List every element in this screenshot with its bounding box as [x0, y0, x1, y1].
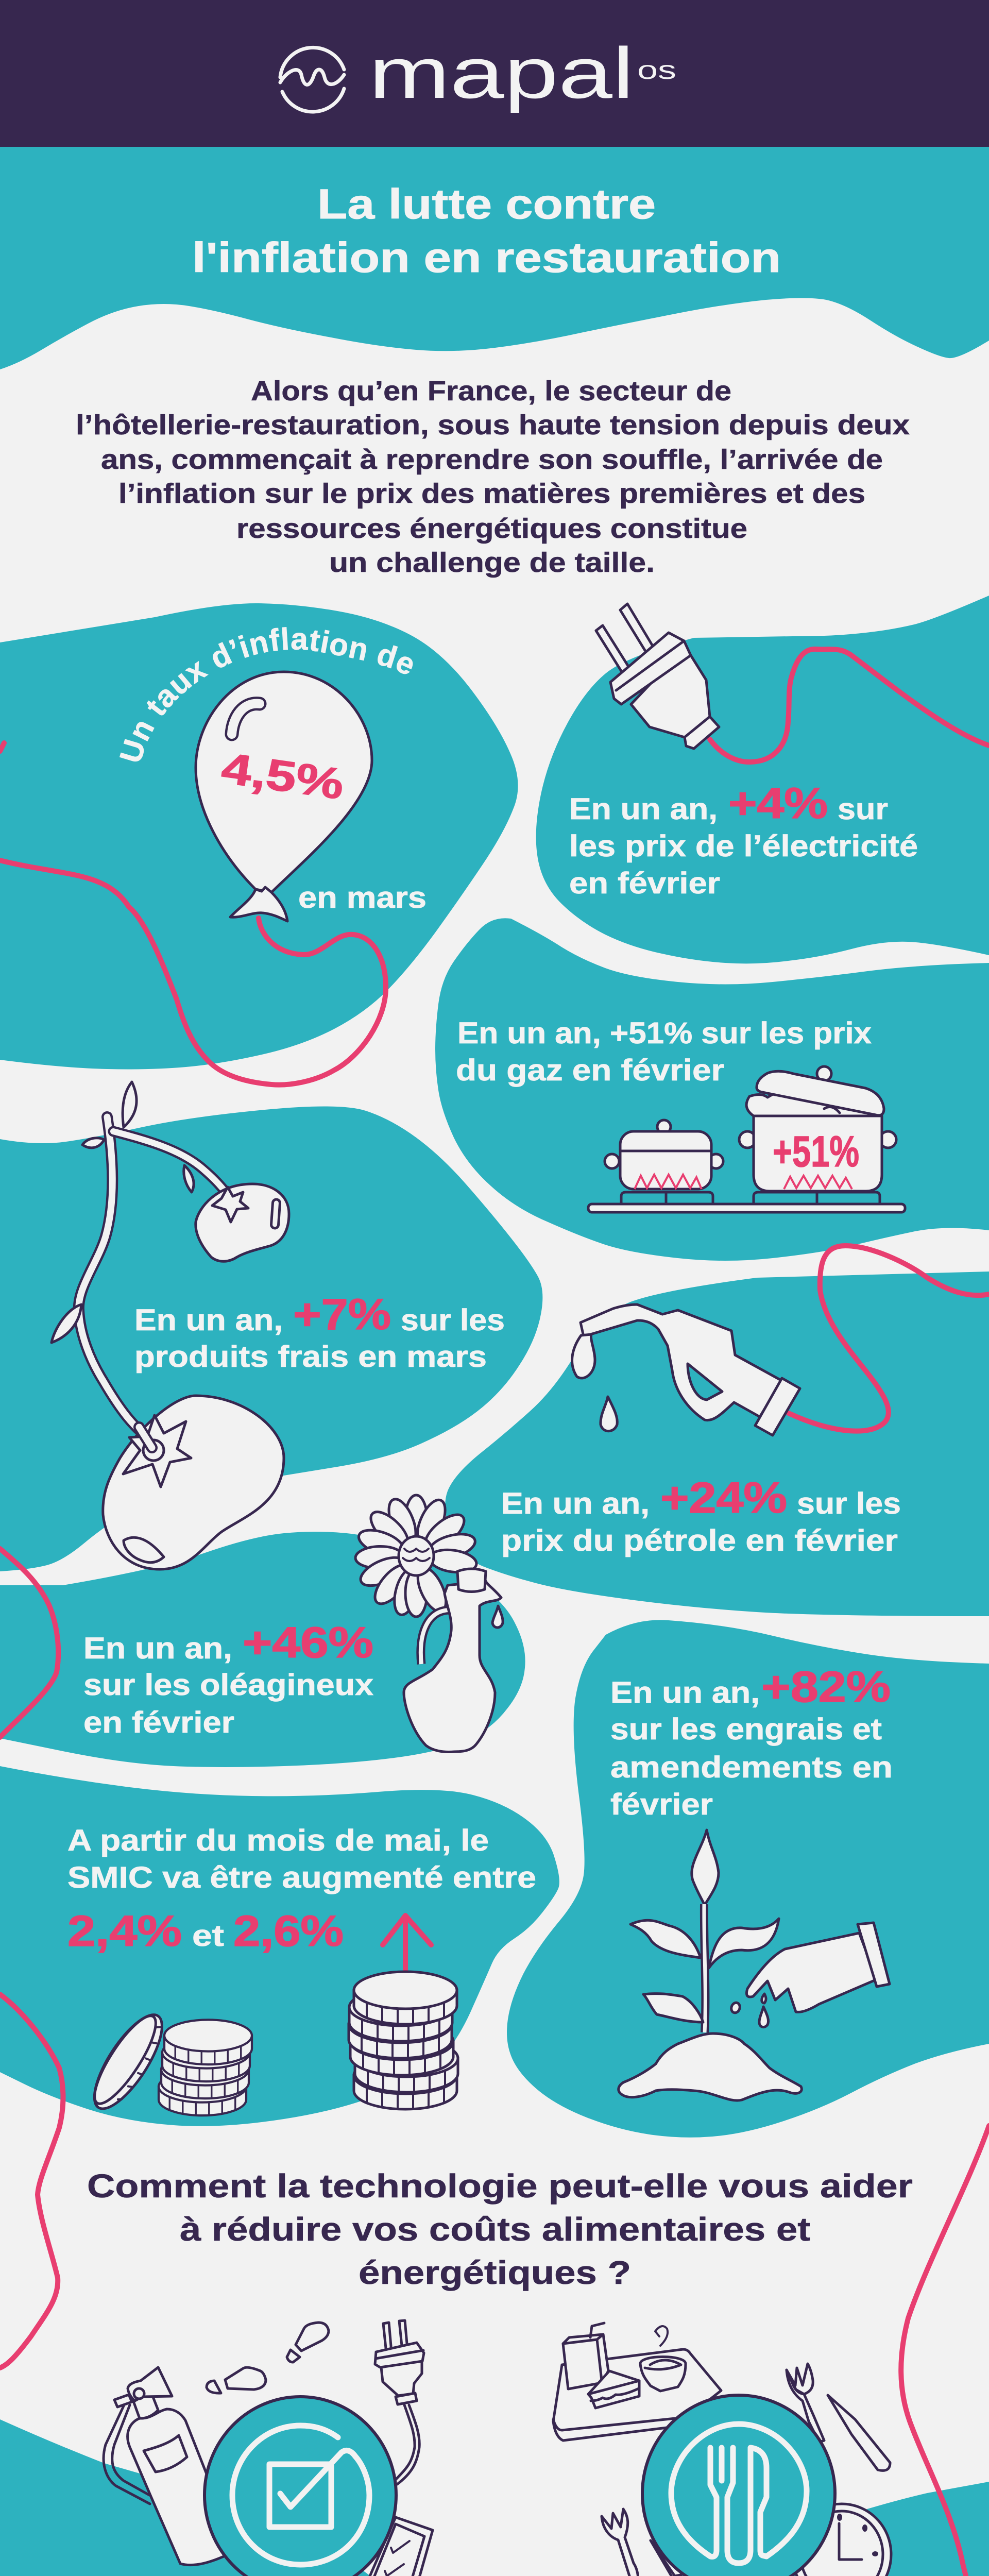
icon: tilted coin [82, 2006, 174, 2118]
panel: fresh products [0, 1082, 542, 1571]
value 4,5%: 4,5% [219, 743, 347, 808]
title: La lutte contre [317, 181, 656, 228]
icon: fork and knife top right [787, 2364, 890, 2470]
icon: extinguisher [104, 2367, 237, 2565]
icon: tray [553, 2349, 721, 2441]
icon: big pot with +51% [739, 1066, 896, 1204]
icon: big tomato [103, 1396, 284, 1569]
title: l'inflation en restauration [192, 234, 781, 281]
text: fertiliser: février [610, 1788, 713, 1821]
header bar with logo [0, 0, 989, 147]
question heading: énergétiques ? [359, 2254, 631, 2291]
text: oleaginous [83, 1618, 373, 1739]
text: fertiliser: En un an, [610, 1676, 760, 1709]
icon: flower and oil bottle [355, 1495, 503, 1752]
flower [355, 1495, 478, 1617]
icon: right coin stack [349, 1972, 458, 2109]
panel: gas [435, 918, 989, 1261]
text: fresh products: En un an, [134, 1303, 283, 1337]
balloon string [0, 860, 386, 1085]
icon: small pot on stove [605, 1120, 723, 1204]
intro text: un challenge de taille. [329, 547, 655, 578]
text: minimum wage: A partir du mois de mai, le [67, 1824, 489, 1857]
icon: big pot with +51%: +51% [773, 1127, 859, 1176]
text: electricity: sur [838, 792, 888, 826]
checkbox [269, 2464, 331, 2527]
curved label: Un taux d’inflation de [120, 627, 413, 761]
intro text: ans, commençait à reprendre son souffle, l’arrivée de [101, 444, 883, 475]
text: petrol: sur les [797, 1487, 901, 1520]
text: oleaginous: en février [83, 1706, 234, 1739]
icon: vine [52, 1082, 235, 1437]
text: gas: du gaz en février [456, 1054, 724, 1087]
text: oleaginous: En un an, [83, 1632, 232, 1665]
panel: electricity [536, 596, 989, 963]
icon: drink carton [563, 2323, 608, 2389]
text: electricity: +4% [728, 779, 828, 827]
intro text: l’inflation sur le prix des matières premières et des [118, 478, 865, 509]
icon: balloon [196, 672, 372, 921]
text: fresh products: produits frais en mars [134, 1340, 487, 1374]
icon: plug [375, 2320, 424, 2484]
plate ring with fork and knife [671, 2424, 807, 2563]
text: minimum wage: SMIC va être augmenté entre [67, 1861, 536, 1894]
text: minimum wage: et [192, 1919, 224, 1953]
pink line: left lower [0, 1994, 63, 2368]
text: fresh products: sur les [401, 1303, 505, 1337]
intro text [76, 376, 910, 578]
illustration: compliance plate [104, 2320, 433, 2576]
text: fresh products [134, 1290, 505, 1374]
text: petrol: En un an, [501, 1487, 650, 1520]
text: oleaginous: +46% [243, 1618, 373, 1667]
panel: petrol [445, 1246, 989, 1616]
oil bottle [404, 1569, 503, 1752]
pink line: left upper [0, 1549, 58, 1737]
panel: top teal band [0, 147, 989, 369]
panel: balloon inflation rate [0, 603, 518, 1088]
icon: left coin stack [159, 2020, 252, 2115]
text: electricity: en février [569, 867, 720, 900]
text: fertiliser: amendements en [610, 1751, 893, 1784]
text: fresh products: +7% [293, 1290, 391, 1338]
plate [642, 2395, 835, 2576]
stove bar [588, 1204, 905, 1212]
illustration: easilys plate [553, 2323, 891, 2576]
logo suffix: os [637, 56, 676, 84]
icon: fork and knife bottom left [602, 2509, 709, 2576]
pump hose [789, 1246, 989, 1431]
icon: plant [630, 1830, 779, 2032]
plug cable [710, 649, 989, 762]
pink line: balloon left tip [0, 743, 4, 751]
panel: fertiliser [507, 1620, 989, 2138]
text: electricity [569, 779, 918, 900]
text: petrol [501, 1473, 901, 1557]
icon: clock [792, 2504, 891, 2576]
arrow up [383, 1916, 431, 1976]
text: fertiliser: sur les engrais et [610, 1713, 882, 1746]
icon: phone [354, 2517, 433, 2576]
text: electricity: les prix de l’électricité [569, 829, 918, 863]
panel: oil [0, 1532, 525, 1767]
title [192, 181, 781, 281]
text: oleaginous: sur les oléagineux [83, 1668, 373, 1702]
icon: cup [640, 2326, 686, 2391]
icon: fuel nozzle [572, 1304, 800, 1435]
text: electricity: En un an, [569, 792, 718, 826]
text: gas [456, 1016, 872, 1087]
question heading: Comment la technologie peut-elle vous aider [87, 2167, 913, 2205]
icon: sandwich [588, 2371, 639, 2408]
question heading [87, 2167, 913, 2291]
icon: plug [596, 604, 719, 749]
logo wordmark: mapal [369, 32, 634, 113]
panel: minimum wage [0, 1766, 559, 2126]
plate ring [232, 2426, 369, 2565]
question heading: à réduire vos coûts alimentaires et [180, 2211, 810, 2248]
text: fertiliser: +82% [761, 1663, 891, 1711]
text: fertiliser [610, 1663, 893, 1821]
logo icon [280, 47, 344, 112]
text: minimum wage: 2,4% [67, 1907, 182, 1955]
text: minimum wage [67, 1824, 536, 1955]
icon: gloved hand with seeds [730, 1923, 890, 2027]
panel: compliance background [0, 2419, 511, 2576]
icon: soil mound [619, 2033, 802, 2100]
intro text: Alors qu’en France, le secteur de [251, 376, 731, 406]
label en mars: en mars [298, 881, 427, 914]
plate [204, 2397, 396, 2576]
icon: small tomato [196, 1184, 289, 1261]
text: minimum wage: 2,6% [233, 1907, 344, 1955]
text: petrol: prix du pétrole en février [501, 1524, 898, 1557]
text: gas: En un an, +51% sur les prix [457, 1016, 872, 1050]
text: petrol: +24% [660, 1473, 787, 1522]
intro text: ressources énergétiques constitue [236, 513, 747, 544]
intro text: l’hôtellerie-restauration, sous haute tension depuis deux [76, 410, 910, 440]
icon: footprints top [207, 2323, 329, 2393]
panel: easilys background [488, 2482, 989, 2576]
pink line: right [901, 2126, 989, 2576]
